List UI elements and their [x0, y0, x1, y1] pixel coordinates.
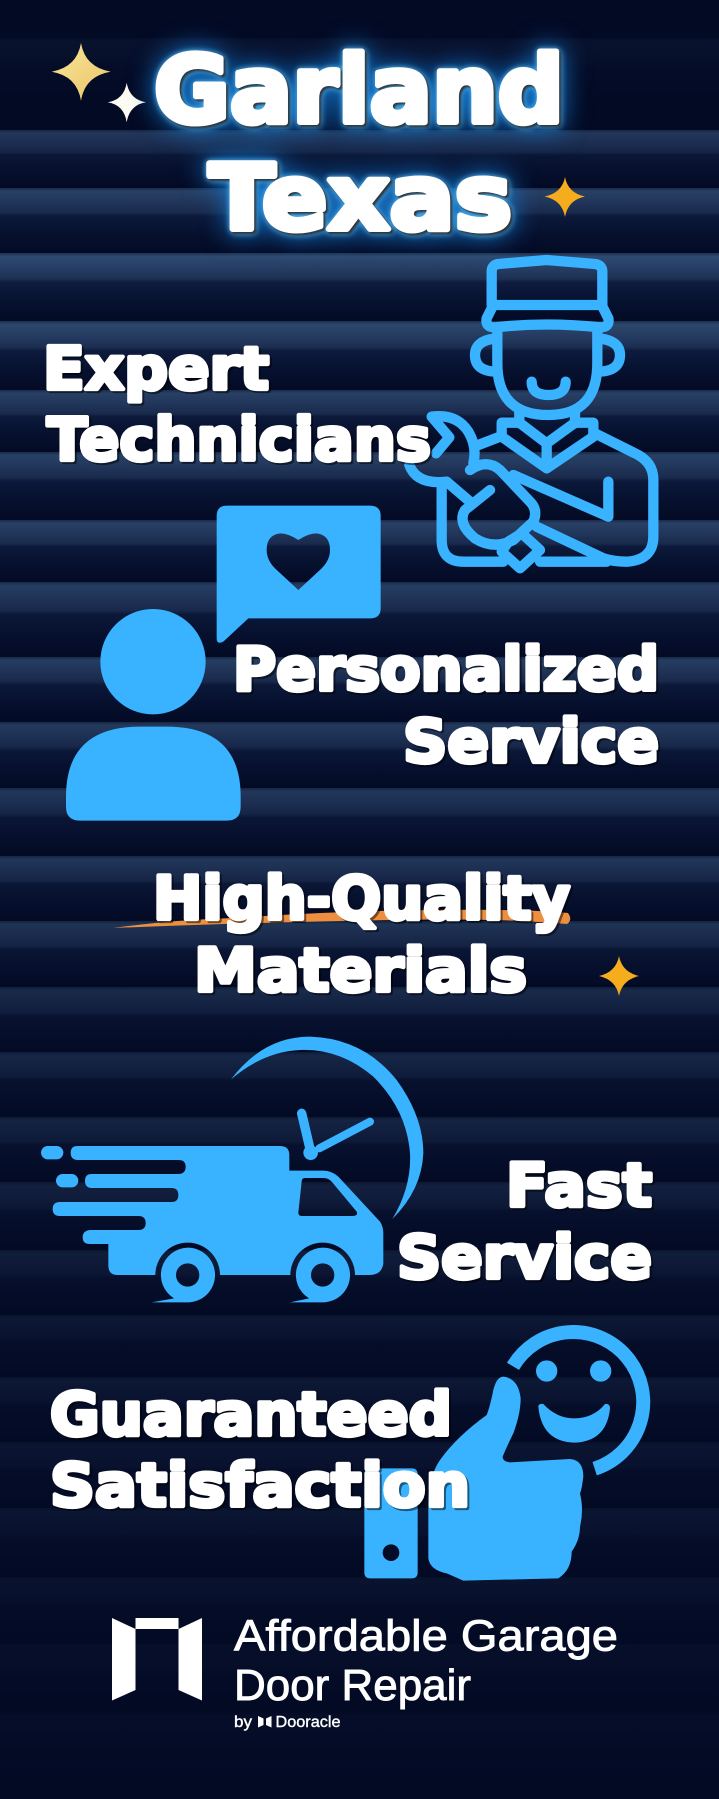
- torso and arm: [442, 433, 653, 562]
- title: Texas: [209, 146, 512, 251]
- speed dots: [41, 1146, 63, 1159]
- logo: Affordable Garage Door Repair: Door Repair: [234, 1661, 471, 1710]
- heading: Fast Service: Service: [397, 1223, 652, 1293]
- collar: [502, 412, 593, 468]
- person head: [100, 609, 206, 714]
- smiley ring: [513, 1332, 643, 1469]
- cuff with button: [364, 1468, 418, 1578]
- icon: door mark: [112, 1618, 202, 1700]
- brand name: Affordable Garage: [234, 1612, 618, 1660]
- icon: thumbs up with smiley: [364, 1332, 643, 1581]
- van body: [53, 1146, 383, 1275]
- wrench and hand: [409, 416, 540, 568]
- wheels: [152, 1248, 215, 1302]
- icon: orange sparkle by Materials: [599, 956, 639, 996]
- smiley mouth: [538, 1404, 610, 1443]
- smiley eyes: [536, 1360, 557, 1382]
- heading: Expert Technicians: Technicians: [47, 405, 431, 474]
- title: Garland: [154, 36, 564, 144]
- icon: orange sparkle by Texas: [544, 177, 585, 217]
- heading: Fast Service: [397, 1151, 652, 1293]
- clock arc: [231, 1037, 423, 1219]
- heading: Guaranteed Satisfaction: Guaranteed: [50, 1380, 452, 1450]
- icon: technician with wrench: [409, 260, 653, 568]
- speech bubble with heart: [217, 506, 381, 643]
- heading: High-Quality Materials: [153, 864, 570, 1006]
- thumb hand: [428, 1377, 583, 1581]
- heading: High-Quality Materials: High-Quality: [153, 864, 570, 934]
- heading: Guaranteed Satisfaction: [50, 1380, 470, 1521]
- clock hands: [302, 1113, 370, 1148]
- person body: [66, 727, 241, 821]
- title: [154, 36, 564, 251]
- logo: Affordable Garage Door Repair: [112, 1612, 618, 1731]
- heading: Expert Technicians: Expert: [43, 334, 269, 403]
- heading: Expert Technicians: [43, 334, 431, 474]
- heading: Guaranteed Satisfaction: Satisfaction: [50, 1451, 470, 1521]
- icon: speeding delivery van with clock: [41, 1037, 423, 1302]
- tagline: by: [234, 1714, 252, 1731]
- orange brush underline: [113, 910, 570, 928]
- hat: [486, 260, 609, 327]
- logo: Affordable Garage Door Repair: Dooracle: [276, 1714, 341, 1731]
- icon: gold sparkle: [52, 43, 111, 101]
- heading: Fast Service: Fast: [506, 1151, 652, 1221]
- heading: High-Quality Materials: Materials: [194, 936, 527, 1006]
- heading: Personalized Service: Personalized: [233, 635, 659, 705]
- face and ears: [475, 330, 620, 415]
- icon: white sparkle: [108, 83, 146, 122]
- heading: Personalized Service: [233, 635, 659, 777]
- icon: customer with heart speech bubble: [66, 506, 381, 821]
- heading: Personalized Service: Service: [403, 707, 659, 777]
